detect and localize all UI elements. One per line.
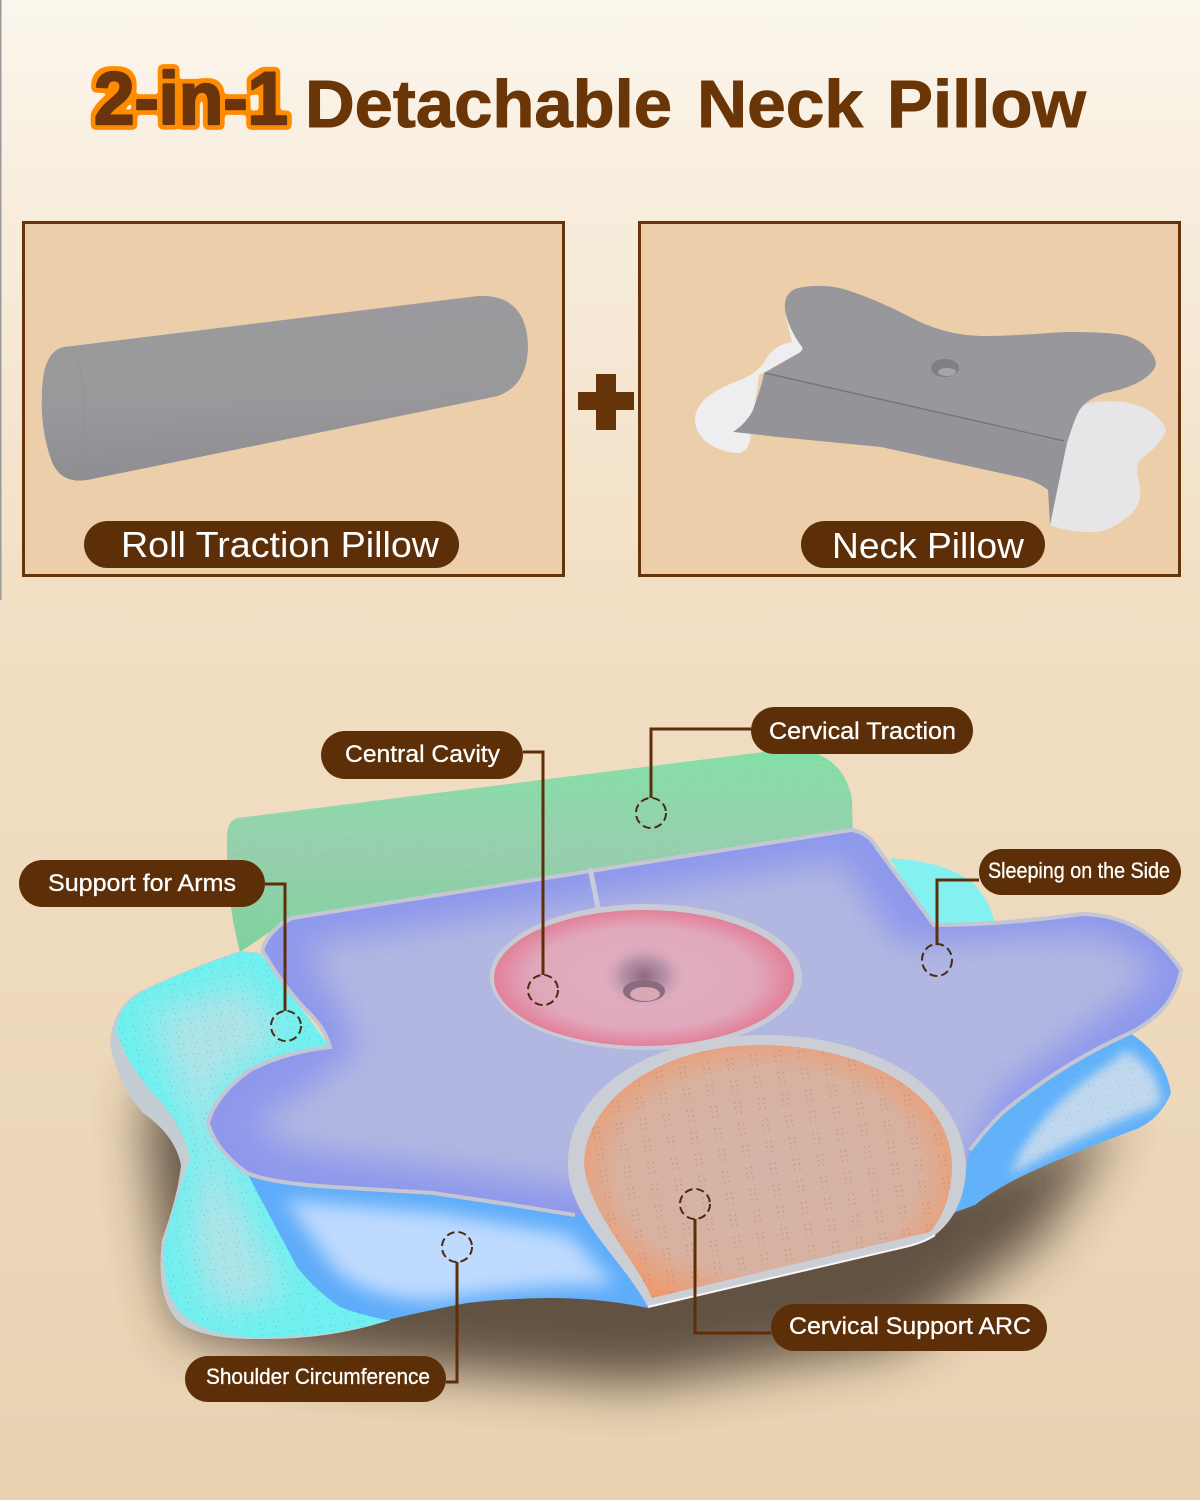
panel: neck pillow [640,222,1180,576]
title: Pillow [887,67,1087,142]
product: grey neck pillow with zipper [695,286,1166,532]
label: neck pillow: Neck Pillow [832,525,1025,566]
callout: shoulder circumference: Shoulder Circumference [206,1364,430,1389]
callout: support for arms: Support for Arms [48,870,236,897]
callout: central cavity: Central Cavity [345,741,500,768]
label: neck pillow [801,521,1045,568]
ground shadow [145,1085,1120,1385]
top surface: sleeping on the side (purple) [200,820,1190,1230]
icon: plus sign [578,374,634,430]
callout: cervical support arc: Cervical Support ARC [789,1313,1031,1340]
back wing: teal [890,858,995,930]
zone: cervical support arc (orange) [568,1035,966,1307]
zone: central cavity (pink) [490,904,802,1050]
label: roll traction pillow: Roll Traction Pillow [121,524,440,565]
front zone: shoulder circumference (light blue) [248,1176,648,1320]
callout: cervical traction: Cervical Traction [769,718,956,745]
title [94,57,1087,142]
panel: roll traction pillow [24,222,564,576]
callout: central cavity [321,731,558,1005]
callout: cervical traction [636,707,973,828]
callout: cervical support arc [680,1189,1047,1351]
callout: sleeping on the side [922,849,1181,976]
product: grey roll pillow [42,296,528,482]
title: Neck [697,67,864,142]
callout: shoulder circumference [185,1232,472,1402]
roll zone: cervical traction (green) [227,748,853,952]
title accent: 2-in-1: 2-in-1 [94,57,288,140]
left wing: teal [110,951,390,1339]
right wing: blue [954,1034,1171,1212]
divider seam [590,868,598,908]
callout: sleeping on the side: Sleeping on the Side [988,858,1170,883]
pillow cross-section diagram [19,707,1190,1402]
title: Detachable [305,67,672,142]
callout: support for arms [19,860,301,1041]
